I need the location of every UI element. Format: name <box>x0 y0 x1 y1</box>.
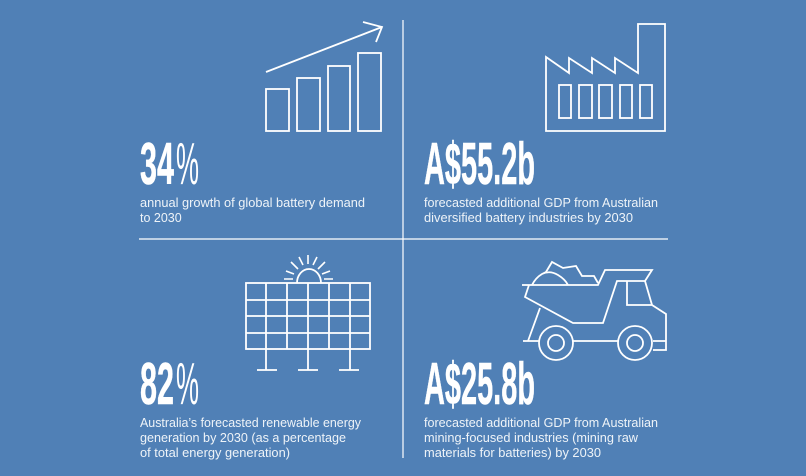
icon: solar panel with sun <box>246 255 370 370</box>
panel: global battery demand <box>140 22 382 225</box>
panel: global battery demand: % <box>176 130 199 197</box>
description: diversified GDP <box>424 196 658 225</box>
icon: mining dump truck <box>522 262 666 360</box>
icon: factory <box>546 24 665 131</box>
description: renewable share: of total energy generation) <box>140 446 290 460</box>
description: renewable share: generation by 2030 (as a percentage <box>140 431 346 445</box>
description: battery demand: annual growth of global battery demand <box>140 196 365 210</box>
panel: diversified battery industries: A$55.2b <box>424 130 535 197</box>
panel: mining-focused industries <box>424 262 666 460</box>
panel: renewable energy generation <box>140 255 370 460</box>
description: mining GDP: materials for batteries) by 2030 <box>424 446 601 460</box>
description: diversified GDP: forecasted additional GDP from Australian <box>424 196 658 210</box>
description: renewable share <box>140 416 362 460</box>
description: battery demand: to 2030 <box>140 211 182 225</box>
icon: rising bar chart with arrow <box>266 22 382 131</box>
description: mining GDP <box>424 416 658 460</box>
panel: diversified battery industries <box>424 24 665 225</box>
description: battery demand <box>140 196 365 225</box>
description: mining GDP: mining-focused industries (mining raw <box>424 431 639 445</box>
description: renewable share: Australia’s forecasted renewable energy <box>140 416 362 430</box>
description: mining GDP: forecasted additional GDP from Australian <box>424 416 658 430</box>
stat: 82%: 82 <box>140 350 174 417</box>
panel: mining-focused industries: A$25.8b <box>424 350 535 417</box>
panel: renewable energy generation: % <box>176 350 199 417</box>
stat: 34%: 34 <box>140 130 174 197</box>
description: diversified GDP: diversified battery industries by 2030 <box>424 211 633 225</box>
